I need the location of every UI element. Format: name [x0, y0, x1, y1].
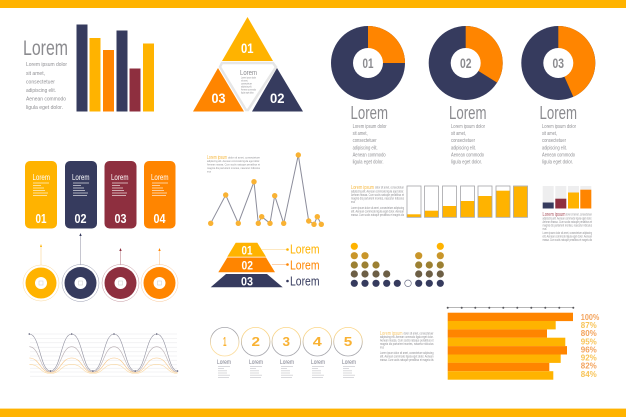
panel: small column chart: Lorem ipsum [542, 212, 566, 218]
caption [207, 155, 261, 174]
panel: donut 02: Lorem [449, 103, 486, 123]
labels: 02 [270, 90, 285, 106]
percent labels: 100% [581, 313, 599, 322]
panel: donut 03: sit amet, [542, 131, 557, 137]
caption: Aenean massa. Cum sociis natoque penatibus et [207, 162, 260, 166]
panel: numbered circles: 2 [252, 335, 260, 349]
text block: lower centre: dolor sit amet, consectetuer [404, 332, 434, 336]
caption: dolor sit amet, consectetuer [375, 186, 405, 190]
panel: donut 03 [521, 26, 595, 166]
panel: numbered circles: Lorem [280, 360, 294, 366]
panel: dot matrix [351, 243, 444, 287]
text block: lower centre: Lorem ipsum dolor sit amet, consectetuer adipiscing [380, 351, 434, 355]
percent labels: 95% [581, 338, 597, 346]
panel: pyramid: 02 [242, 258, 253, 272]
bars [448, 313, 573, 380]
panel: small column chart: dolor sit amet, consectetuer [566, 212, 593, 216]
percent labels: 84% [581, 370, 597, 379]
heading: Lorem [23, 37, 68, 60]
caption: adipiscing elit. Aenean commodo ligula eget dolor. [351, 190, 404, 194]
panel: pyramid: Lorem [290, 274, 320, 288]
panel: cards: Lorem [151, 173, 169, 182]
percent labels: 92% [581, 354, 597, 362]
panel: pyramid: Lorem [290, 242, 320, 256]
panel: triangle diagram: consectetuer [241, 82, 252, 86]
panel: cards: 03 [114, 211, 126, 226]
text block: lower centre: Lorem ipsum [380, 331, 403, 337]
axis [447, 307, 574, 309]
triangle 01 [222, 17, 273, 61]
caption: dolor sit amet, consectetuer [228, 156, 260, 160]
panel: bar chart with heading [23, 24, 154, 112]
text block: Lorem ipsum dolor [26, 62, 67, 68]
panel: donut 01 [331, 26, 405, 166]
panel: donut 02 [429, 26, 503, 165]
series line [211, 155, 321, 224]
panel: triangle diagram: ligula eget dolor. [241, 90, 254, 94]
panel: numbered circles: 5 [344, 335, 352, 349]
panel: triangle diagram [193, 17, 303, 112]
caption: massa. Cum sociis natoque penatibus et magnis dis [351, 213, 404, 217]
caption: Aenean massa. Cum sociis natoque penatibus et [351, 193, 404, 197]
text block: adipiscing elit. [26, 88, 56, 94]
panel: donut 03: consectetuer [542, 138, 566, 144]
panel: donut 01: adipiscing elit. [353, 146, 378, 152]
text block: lower centre: massa. Cum sociis natoque penatibus et magnis dis [380, 358, 434, 362]
panel: numbered circles: Lorem [249, 360, 263, 366]
panel: donut 01: 01 [362, 55, 374, 71]
panel: small column chart [542, 186, 593, 242]
centre text: Lorem [240, 70, 257, 77]
text block: lower centre: mus [380, 346, 384, 350]
bars [76, 24, 154, 112]
panel: small column chart: adipiscing elit. Aenean commodo ligula eget dolor. [542, 216, 592, 220]
caption: Lorem ipsum [207, 155, 227, 161]
caption [351, 185, 405, 217]
text block: sit amet, [26, 71, 45, 77]
text block: consectetuer [26, 80, 55, 86]
panel: donut 01: Lorem [350, 103, 388, 123]
panel: donut 03: Aenean commodo [542, 152, 575, 158]
panel: donut 02: Lorem ipsum dolor [451, 124, 485, 130]
panel: progress bars [351, 185, 528, 217]
panel: numbered circles: Lorem [342, 360, 356, 366]
caption: magnis dis parturient montes, nascetur ridiculus [207, 166, 261, 170]
panel: donut 01: Aenean commodo [353, 152, 386, 158]
panel: triangle diagram: adipiscing elit. [241, 84, 252, 88]
panel: pyramid [211, 242, 320, 288]
panel: small column chart: elit. Aenean commodo ligula eget dolor. Aenean [542, 234, 592, 238]
panel: numbered circles: Lorem [311, 360, 325, 366]
panel: small column chart: magnis dis parturient montes, nascetur ridiculus [542, 224, 592, 228]
caption: Lorem ipsum [351, 185, 374, 191]
caption: mus [207, 170, 212, 174]
panel: numbered circles [210, 327, 362, 378]
caption: Lorem ipsum dolor sit amet, consectetuer adipiscing [351, 206, 404, 210]
panel: donut 01: consectetuer [353, 138, 377, 144]
top band [0, 0, 626, 8]
panel: numbered circles: Lorem [217, 360, 231, 366]
panel: donut 02: consectetuer [451, 138, 475, 144]
labels [212, 40, 285, 106]
panel: donut 02: ligula eget dolor. [451, 160, 482, 166]
percent labels [581, 313, 599, 379]
triangle 03 [193, 68, 244, 112]
labels: 03 [212, 90, 226, 106]
caption: mus [351, 200, 355, 204]
panel: donut 01: ligula eget dolor. [353, 160, 384, 166]
text block: lower centre: adipiscing elit. Aenean commodo ligula eget dolor. [380, 335, 434, 339]
centre frame [220, 63, 276, 110]
panel: pyramid: 01 [242, 244, 253, 258]
caption: adipiscing elit. Aenean commodo ligula eget dolor. [207, 159, 260, 163]
panel: numbered circles: 4 [313, 335, 322, 349]
panel: circle pins [23, 233, 178, 302]
panel: cards: 04 [154, 211, 166, 226]
panel: horizontal bar chart [447, 307, 599, 380]
series points [208, 152, 324, 227]
text block [26, 62, 67, 111]
panel: triangle diagram: Lorem ipsum dolor [241, 76, 256, 80]
triangle 02 [252, 68, 303, 112]
panel: line chart [207, 152, 324, 227]
panel: numbered circles: 1 [223, 335, 227, 349]
panel: cards: Lorem [111, 173, 129, 182]
panel: cards [25, 161, 176, 228]
panel: donut 01: Lorem ipsum dolor [353, 124, 387, 130]
panel: wave chart [28, 333, 178, 376]
panel: donut 03: 03 [552, 55, 564, 71]
panel: cards: Lorem [32, 173, 50, 182]
panel: small column chart: Lorem ipsum dolor sit amet, consectetuer adipiscing [542, 231, 592, 235]
caption: magnis dis parturient montes, nascetur ridiculus [351, 196, 404, 200]
panel: donut 03: Lorem ipsum dolor [542, 124, 576, 130]
caption: elit. Aenean commodo ligula eget dolor. Aenean [351, 210, 404, 214]
panel: donut 03: ligula eget dolor. [542, 160, 573, 166]
percent labels: 80% [581, 329, 597, 338]
percent labels: 96% [581, 346, 597, 354]
text block: lower centre: elit. Aenean commodo ligula eget dolor. Aenean [380, 354, 434, 358]
text block: Aenean commodo [26, 96, 66, 102]
labels: 01 [241, 40, 254, 56]
panel: donut 03: adipiscing elit. [542, 146, 567, 152]
fills [407, 186, 528, 217]
panel: triangle diagram: Aenean commodo [241, 88, 256, 92]
text block: ligula eget dolor. [26, 105, 63, 111]
panel: donut 02: 02 [460, 55, 472, 71]
percent labels: 87% [581, 321, 597, 330]
panel: donut 03: Lorem [540, 103, 577, 123]
text block: lower centre: Aenean massa. Cum sociis natoque penatibus et [380, 338, 434, 342]
panel: small column chart: mus [542, 227, 547, 231]
text block: lower centre [380, 331, 434, 362]
panel: cards: Lorem [72, 173, 90, 182]
panel: donut 02: adipiscing elit. [451, 146, 476, 152]
panel: triangle diagram: sit amet, [241, 78, 248, 82]
panel: cards: 01 [36, 211, 46, 226]
panel: donut 02: sit amet, [451, 131, 466, 137]
panel: numbered circles: 3 [282, 335, 290, 349]
text block: lower centre: magnis dis parturient montes, nascetur ridiculus [380, 342, 434, 346]
panel: small column chart: massa. Cum sociis natoque penatibus et magnis dis [542, 238, 592, 242]
panel: donut 01: sit amet, [353, 131, 368, 137]
panel: donut 02: Aenean commodo [451, 152, 484, 158]
frames [407, 186, 528, 217]
bottom band [0, 409, 626, 417]
panel: pyramid: Lorem [290, 258, 320, 272]
panel: cards: 02 [74, 211, 86, 226]
panel: small column chart: Aenean massa. Cum sociis natoque penatibus et [542, 220, 592, 224]
percent labels: 82% [581, 362, 597, 370]
panel: pyramid: 03 [241, 274, 253, 288]
